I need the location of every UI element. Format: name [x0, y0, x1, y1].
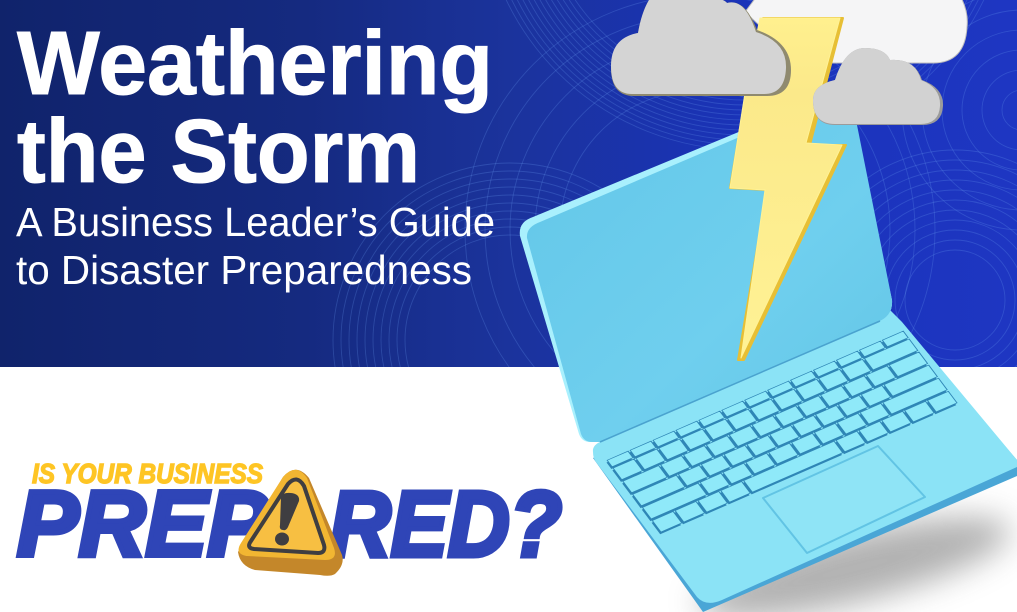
- headline: PREP: PREP: [17, 472, 270, 576]
- background: concentric radio rings: [332, 0, 1017, 367]
- headline: RED?: RED?: [329, 472, 562, 576]
- icon: lightning bolt: [730, 18, 846, 360]
- laptop shadow: [692, 496, 1017, 612]
- kicker text: IS YOUR BUSINESS: [32, 458, 263, 489]
- grey cloud small: [813, 48, 943, 125]
- subtitle: [16, 199, 495, 293]
- subtitle: A Business Leader’s Guide: [16, 199, 495, 245]
- laptop illustration: [520, 88, 1017, 612]
- tagline: is your business prepared: [17, 458, 562, 576]
- laptop base: [593, 300, 1017, 612]
- trackpad: [763, 446, 925, 553]
- title: [17, 14, 493, 202]
- title: Weathering: [17, 14, 493, 114]
- grey cloud left: [611, 0, 791, 96]
- keyboard: [605, 331, 958, 534]
- title: the Storm: [17, 102, 420, 202]
- panel: blue header background: [0, 0, 1017, 367]
- white cloud: [745, 0, 967, 63]
- laptop screen: [520, 88, 892, 442]
- icon: warning triangle: [238, 470, 343, 576]
- subtitle: to Disaster Preparedness: [16, 247, 472, 293]
